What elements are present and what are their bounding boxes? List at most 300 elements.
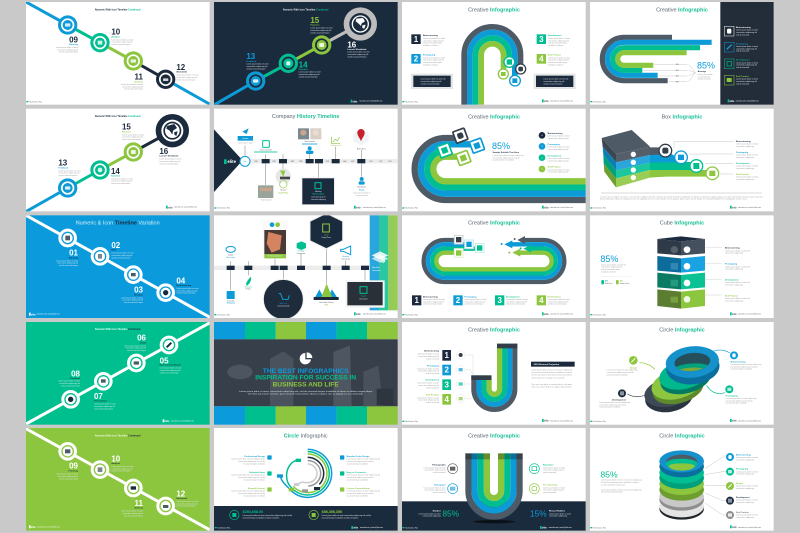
percent block: elit sed do eiusmod tempor [601,491,623,494]
connectors [231,245,365,290]
year labels: 1996 [291,161,294,163]
heading: Numeric With Icon Timeline Continued [95,435,141,438]
track bands [415,138,587,200]
node 11 [124,479,143,497]
label 4: Lorem ipsum dolor sit amet elit [725,297,750,300]
label 13: Lorem ipsum dolor sit amet [246,63,269,66]
track bands [424,240,564,282]
percent block: Lorem ipsum dolor sit amet elit [601,263,626,266]
node 14 [90,160,110,180]
footer: www.elite.com | contact@elite.com [738,419,762,422]
left item 1: Lorem ipsum dolor sit amet adipiscing elit [231,458,265,461]
label 11: consectetur adipiscing elit [122,512,143,515]
item 3: consectetur adipiscing [736,487,754,490]
dollar stack: Major Sales [372,266,380,269]
label 03: sed do eiusmod tempor [124,301,143,304]
milestone map pin [353,129,369,151]
slide: lime timeline 09-12 [26,428,210,531]
step 3: Development [425,379,439,382]
right item 3 [340,487,381,497]
label 16 [159,147,182,165]
label 05 [160,356,182,374]
footer: www.elite.com | contact@elite.com [550,419,574,422]
footer: www.elite.com | contact@elite.com [550,313,574,316]
item 1 [726,453,759,461]
panel item 1: Lorem ipsum dolor sit amet [736,29,759,32]
item icon speech: Idea Creation [226,256,235,259]
note left: Lorem ipsum dolor sit amet elit [421,77,446,80]
item 3: Design [736,483,744,485]
slide: stacked rings infographic [590,322,774,425]
step 4 [537,53,571,66]
slide: dark timeline 13-16 [213,2,398,105]
label 13: consectetur adipiscing elit [246,65,268,68]
label 11: Delivery [135,81,144,83]
item newspaper: Newspaper [434,485,446,487]
label 2: consectetur adipiscing [725,268,743,271]
note right: consectetur adipiscing elit [543,80,565,83]
timeline band [214,266,370,270]
label 14 [111,167,134,185]
footer: elite [356,313,361,316]
item icon speech [226,246,235,259]
stat 15: Lorem ipsum dolor sit amet [549,512,572,515]
percent block [600,469,642,494]
right item 1: Lorem ipsum dolor sit amet adipiscing elit [347,458,381,461]
label 14 [299,61,321,78]
label 15: Lorem ipsum dolor sit amet [310,27,333,30]
step 1: Lorem ipsum dolor sit amet [423,37,446,40]
cube layer navy [657,236,705,255]
panel item 2: sed do eiusmod [736,51,749,53]
node 05 [160,336,178,354]
percent block: 85% [600,254,618,264]
footer: elite [356,206,361,209]
label 04 [176,276,199,295]
node 12 [156,497,175,515]
step 2: 2 [456,296,461,305]
label 11: consectetur adipiscing elit [122,85,143,88]
panel item 3: Lorem ipsum dolor sit amet [736,61,759,64]
percent labels: 85% [676,64,679,66]
label 13: Feedback [58,168,69,170]
label 2: consectetur adipiscing [736,156,754,159]
photo card [263,220,287,259]
step 2 [411,53,446,66]
circle icons [659,144,719,180]
label 16: Lorem ipsum dolor sit amet [347,51,370,54]
footer logo: www.elite.com | contact@elite.com [37,525,61,528]
slide: J infographic [402,322,586,425]
label 13: consectetur adipiscing elit [58,172,80,175]
label 12: sed do eiusmod tempor [176,78,196,81]
footer: Your Business Plan [405,100,418,103]
label 4: End Product [725,294,738,297]
item 1: consectetur adipiscing [736,458,754,461]
label 07: consectetur adipiscing elit [94,405,115,408]
dark triangle with logo [214,129,243,192]
note left: consectetur adipiscing elit [421,80,442,83]
footer logo: elite [31,313,36,316]
ring blue [666,346,720,384]
item 2: Lorem ipsum dolor sit amet [736,470,759,473]
item photographs: Lorem ipsum dolor sit amet [424,466,446,469]
item blue icon: Testimonial [227,302,235,305]
label 14: sed do eiusmod tempor [299,75,318,78]
panel item 3: sed do eiusmod [736,67,749,69]
label 11: Lorem ipsum dolor sit amet [121,83,143,86]
percent block: Lorem ipsum dolor sit amet adipiscing [493,154,523,157]
callout prototyping [725,385,756,405]
right item 2: consectetur adipiscing elit sed do [347,476,374,479]
step 4: 4 [539,296,544,305]
footer: www.elite.com | contact@elite.com [363,312,386,315]
item 5: consectetur adipiscing [736,516,754,519]
right item 3: Lorem ipsum dolor sit amet adipiscing elit [347,490,381,493]
step 4: consectetur adipiscing elit [418,399,439,402]
stat 15 [530,509,572,519]
label 04: Lorem ipsum dolor sit amet [176,287,199,290]
title: Creative Infographic [468,114,520,120]
node 10 [91,460,109,479]
node 13 [246,71,265,91]
step 1: incididunt ut labore [423,44,438,47]
footer band: Lorem ipsum dolor sit amet consectetur adipiscing elit sed do [243,514,292,517]
step 4: 4 [444,395,449,404]
panel item 1: sed do eiusmod [736,34,749,36]
bottom colour stripes [214,406,398,425]
item broadcasting: consectetur adipiscing elit [543,489,564,492]
list D: consectetur adipiscing elit [548,171,569,174]
footer: Your Business Plan [29,100,42,103]
label 07: Lorem ipsum dolor sit amet [94,403,117,406]
footer [590,99,759,103]
timeline band: Start [243,160,247,163]
stat 85: Lorem ipsum dolor sit amet [419,512,441,515]
panel item 3: consectetur adipiscing elit [736,64,757,67]
3D box [602,130,650,187]
label 1: Brainstorming [725,247,740,250]
milestone team photo [258,185,273,202]
footer logo [29,313,60,316]
step 2: Lorem ipsum dolor sit amet [464,298,487,301]
node 14 [279,54,298,73]
node 15 [312,35,331,55]
label 02: sed do eiusmod tempor [111,256,131,259]
label 15: consectetur adipiscing elit [122,136,143,139]
list A [539,132,570,140]
monitor panel [345,280,385,308]
left item 3 [231,487,272,497]
step 3: 3 [497,296,502,305]
footer [214,312,386,316]
step 3: 3 [444,380,449,389]
label 2: Lorem ipsum dolor sit amet [736,154,759,157]
label 1: Lorem ipsum dolor sit amet elit [725,249,750,252]
heading: Numeric With Icon Timeline Continued [283,9,329,12]
list B: Lorem ipsum dolor sit amet [548,146,570,149]
label 06: sed do eiusmod tempor [127,349,146,352]
label 14: Lorem ipsum dolor sit amet [299,71,321,74]
right item 1 [340,455,381,465]
label 06 [124,334,147,352]
list D: Lorem ipsum dolor sit amet [548,168,570,171]
footer logo [351,100,383,103]
left item 1: eiusmod tempor incididunt [244,462,265,465]
slide: green timeline 05-08 [26,322,210,425]
item teal box [297,241,306,255]
label 10: consectetur adipiscing elit [111,41,133,44]
percent block: ut enim ad minim veniam quis [601,483,625,486]
item broadcasting [529,484,566,494]
footer: Your Business Plan [593,526,606,529]
label 01: 01 [69,249,79,258]
footer [402,526,572,530]
panel item 3: Development [736,59,750,62]
milestone robot: Sustain [359,188,364,191]
step 4: End Product [548,53,561,56]
item teal box: Test Stage [297,250,305,253]
footer logo: www.elite.com | contact@elite.com [37,313,60,316]
label 01: Lorem ipsum dolor sit amet [56,259,78,262]
right item 1: consectetur adipiscing elit sed do [347,460,374,463]
list A: Lorem ipsum dolor sit amet [548,135,570,138]
left item 2: Lorem ipsum dolor sit amet adipiscing elit [231,474,265,477]
footer: Your Business Plan [217,207,230,210]
footer: elite [732,526,737,529]
label 01: sed do eiusmod tempor [59,264,78,267]
step 3 [495,295,529,306]
concentric arcs [281,449,332,497]
label 13 [58,159,81,177]
label 12 [176,489,199,508]
label 09: 09 [69,462,79,471]
list C: Lorem ipsum dolor sit amet [548,157,570,160]
step 1 [417,350,465,361]
node 09 [58,442,77,461]
node 08 [61,390,80,409]
rotated icons [437,128,485,166]
label 01: Planning [69,257,79,259]
label 3 [736,162,759,170]
item 2: consectetur adipiscing [736,473,754,476]
panel item 2: Prototyping [736,42,749,45]
item blue icon [227,291,235,305]
year labels: 2007 [351,161,354,163]
big percent: 85% [697,60,715,70]
footer: elite [542,527,547,530]
callout arrows [627,350,730,397]
callout prototyping: consectetur adipiscing elit sed do [726,399,753,402]
label 07: 07 [94,392,103,401]
label 13: sed do eiusmod tempor [58,174,78,177]
right item 1: Branded Color Design [347,456,370,458]
footer band [214,506,398,531]
note right [534,74,576,89]
footer: Your Business Plan [405,313,418,316]
list B: Prototyping [548,143,560,146]
step 1: Brainstorming [423,295,438,298]
list B: B [541,146,542,148]
footer logo [29,525,61,529]
label 10: 10 [111,28,121,37]
item 4: consectetur adipiscing [736,501,754,504]
label 09: consectetur adipiscing elit [57,48,78,51]
footer band: Lorem ipsum dolor sit amet consectetur adipiscing elit sed do [322,514,371,517]
footer logo [163,419,195,423]
label 10: 10 [111,454,121,463]
step 3: Development [548,34,562,37]
step 2 [453,295,487,306]
label 14: 14 [111,167,120,176]
step 2: sed do eiusmod tempor [423,61,442,64]
step 1 [412,295,446,306]
dark photo band [214,339,398,406]
subtext [239,390,374,396]
step 3: sed do eiusmod [426,387,439,389]
dollar stack [372,251,388,272]
footer: elite [544,420,549,423]
milestone plant [276,169,291,194]
label 01 [56,249,79,267]
callout design [607,356,638,376]
left item 3: Lorem ipsum dolor sit amet adipiscing elit [231,490,265,493]
milestone chart icon [331,137,341,147]
footer [590,312,762,316]
right item 2: Lorem ipsum dolor sit amet adipiscing elit [347,474,381,477]
J bands [474,344,515,409]
panel item 1 [724,26,759,36]
subtext: Ut enim ad minim veniam, quis nostrud exercitation ullamco laboris nisi ut aliquip ex ea commodo [248,393,363,396]
step 1: consectetur adipiscing elit [423,39,444,42]
footer logo: elite [165,420,170,423]
year labels: 1993 [272,161,276,163]
item photographs [424,464,458,474]
footer: www.elite.com | contact@elite.com [738,526,762,529]
list C: C [541,157,543,159]
label 02: 02 [111,241,121,250]
arrow heads [504,236,531,257]
list D: D [541,169,543,171]
label 12 [176,63,199,81]
year labels: 2010 [369,161,373,163]
item megaphone [341,246,351,260]
year labels: 2012 [379,161,382,163]
stat 15: consectetur adipiscing [549,515,567,518]
label 10 [111,454,134,473]
node 10 [90,33,110,52]
label 16 [347,40,370,58]
bottom caption [600,192,762,201]
label 04: 04 [176,276,186,285]
right item 3: consectetur adipiscing elit sed do [347,492,374,495]
U shadow [473,520,515,523]
step 3: consectetur adipiscing elit [548,39,569,42]
label 2: Lorem ipsum dolor sit amet elit [725,265,750,268]
node 16 globe [156,114,189,147]
slide: cylinder infographic [590,428,774,531]
android stat teal [601,280,613,285]
label 11: Delivery [135,508,144,510]
label 07: Presentation [94,400,108,403]
footer: elite [730,100,735,103]
item education: consectetur adipiscing elit [543,469,564,472]
panel item 4: End Product [736,75,749,78]
list B [539,143,570,151]
footer [26,100,42,103]
year labels: 2014 [388,161,392,163]
slide: timeline with hexagon [214,213,398,319]
milestone robot: Lorem ipsum dolor sit [353,192,371,195]
callout brainstorming: consectetur adipiscing elit sed do [731,365,758,368]
label 09: Finishing [68,471,79,473]
percent links [643,64,695,82]
node 11 [124,51,143,71]
label 10 [111,28,134,46]
slide: creative infographic arch [402,2,586,105]
node 03 [124,265,143,284]
step 4: Lorem ipsum dolor sit amet [548,56,571,59]
item 2: Prototyping [736,468,749,471]
step 3: consectetur adipiscing elit [506,300,527,303]
footer: elite [544,313,549,316]
footer: elite [732,313,737,316]
title: Creative Infographic [468,433,520,439]
label 03: Analysis [134,293,144,296]
side stripes [370,215,398,310]
footer: www.elite.com | contact@elite.com [363,206,386,209]
label 04: Brainstorming [176,284,192,287]
slide: title divider [214,322,398,425]
label 2 [725,263,750,271]
label 12: Worldwide [176,72,188,74]
item broadcasting: Pre-Operating [543,484,558,487]
ribbons [649,147,717,178]
callout development: consectetur adipiscing elit sed do [599,403,626,406]
horizontal bands [602,37,712,81]
left item 1: Professional Design [244,456,266,458]
footer band: $253,658.00 [243,510,263,514]
stat 15: Record Holders [549,511,566,513]
milestone plant: Growth Phase [278,191,288,194]
label 1 [725,247,750,255]
leader lines [674,142,733,174]
slide: cube infographic [590,215,774,318]
right item 1: eiusmod tempor incididunt [347,462,368,465]
label 15 [122,123,145,141]
step 4: sed do eiusmod [426,402,439,404]
left item 3: Beautiful Layout [248,487,265,490]
label 4: End Product [736,173,749,176]
footer logo: elite [31,526,36,529]
arch bands [464,27,520,105]
label 14: sed do eiusmod tempor [111,182,130,185]
step 3: Lorem ipsum dolor sit amet [417,382,439,385]
label 09: Lorem ipsum dolor sit amet [56,46,78,49]
step 4: Lorem ipsum dolor sit amet [417,396,439,399]
node 13 [58,178,77,198]
item 1: Brainstorming [736,453,751,456]
label 15: sed do eiusmod tempor [122,138,141,141]
android stat teal: 95% [605,281,609,283]
item photographs: Photographs [432,464,446,467]
label 16: 16 [159,147,169,156]
label 10: Lorem ipsum dolor sit amet [111,465,134,468]
slide: white timeline 13-16 [25,109,210,212]
percent block: 85% [600,469,618,479]
heading: Numeric With Icon Timeline Continued [95,9,141,12]
label 3: Development [725,278,739,281]
